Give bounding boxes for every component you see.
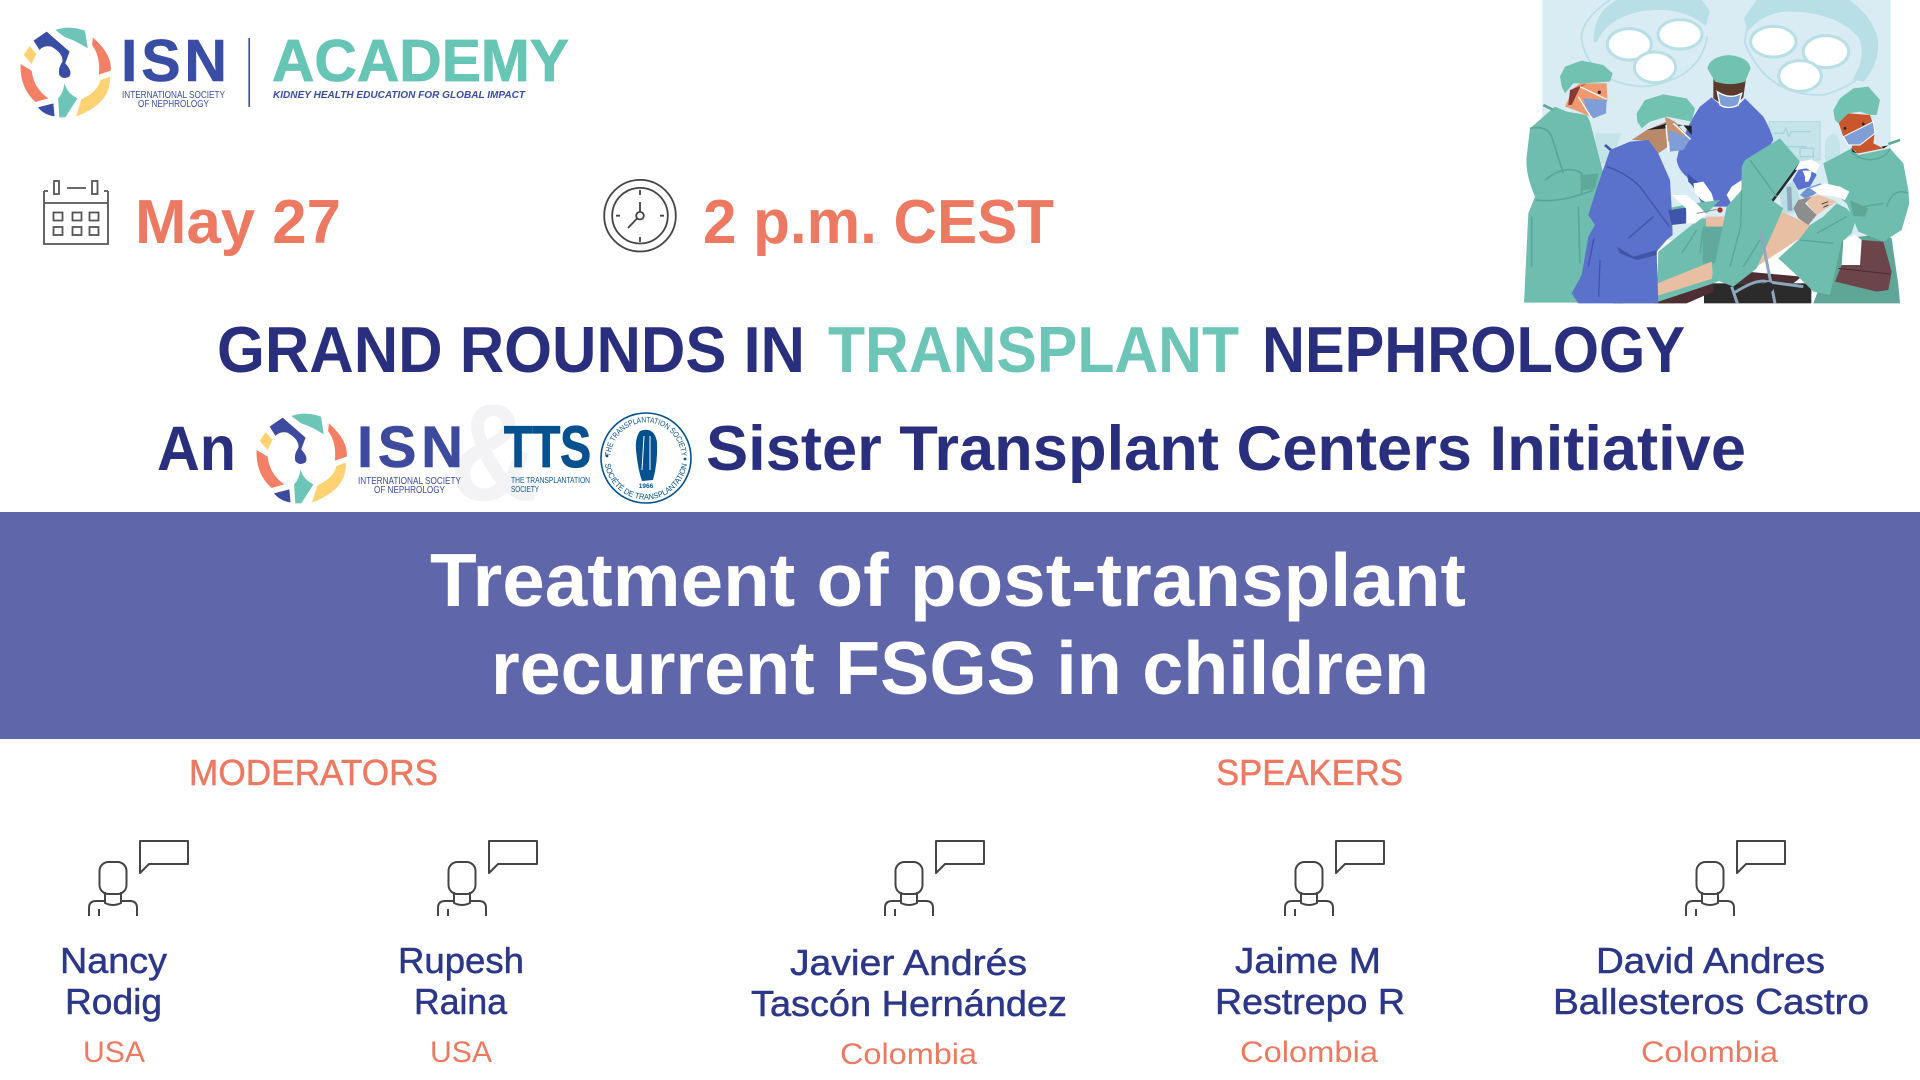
room background: [1542, 0, 1891, 240]
icon: ISN ring emblem small: [257, 414, 347, 503]
ISN subtitle: INTERNATIONAL SOCIETY: [122, 90, 225, 101]
TTS subtitle: SOCIETY: [511, 484, 539, 494]
Academy wordmark: ACADEMY: [272, 28, 569, 94]
ISN wordmark: ISN: [121, 28, 227, 94]
heading: Grand Rounds: TRANSPLANT: [828, 313, 1239, 386]
illustration: surgical team in operating room: [1500, 0, 1909, 303]
moderator: Nancy Rodig: Rodig: [65, 981, 162, 1022]
moderator: Rupesh Raina: Raina: [414, 981, 508, 1022]
heading: speakers: SPEAKERS: [1216, 752, 1403, 793]
TTS subtitle: [511, 475, 590, 494]
icon: person with speech bubble 1: [89, 841, 188, 916]
heading: initiative line with partner logos: [157, 376, 1746, 530]
moderator: Rupesh Raina: USA: [430, 1036, 492, 1069]
icon: person with speech bubble 4: [1285, 841, 1384, 916]
speaker: David Andres Ballesteros Castro: Ballesteros Castro: [1553, 981, 1869, 1022]
heading: Grand Rounds: GRAND ROUNDS IN: [217, 313, 805, 386]
moderator: Rupesh Raina: [398, 940, 524, 1069]
Academy tagline: KIDNEY HEALTH EDUCATION FOR GLOBAL IMPACT: [273, 89, 527, 101]
date: May 27: [135, 188, 341, 257]
moderator: Nancy Rodig: Nancy: [60, 940, 167, 981]
speaker: Javier Andrés Tascón Hernández: [751, 942, 1067, 1071]
speaker: Jaime M Restrepo R: [1215, 940, 1405, 1069]
TTS wordmark: TTS: [504, 415, 591, 480]
seal: The Transplantation Society: 1966: [639, 483, 654, 490]
icon: person with speech bubble 3: [885, 841, 984, 916]
speaker: Jaime M Restrepo R: Jaime M: [1235, 940, 1381, 981]
surgeon: front in blue: [1572, 94, 1717, 303]
anaesthesia mask and hands: [1789, 159, 1849, 211]
TTS subtitle: THE TRANSPLANTATION: [511, 475, 590, 485]
moderator: Rupesh Raina: Rupesh: [398, 940, 524, 981]
banner: session topic: [0, 512, 1920, 739]
table stand: [1732, 232, 1803, 303]
ISN subtitle: OF NEPHROLOGY: [138, 99, 209, 110]
icon: clock: [604, 180, 676, 252]
speaker: David Andres Ballesteros Castro: Colombia: [1641, 1036, 1778, 1069]
ISN subtitle small: INTERNATIONAL SOCIETY: [358, 476, 461, 487]
icon: person with speech bubble 5: [1686, 841, 1785, 916]
heading: Grand Rounds: [217, 313, 1685, 386]
banner: session topic: recurrent FSGS in children: [491, 626, 1429, 710]
speaker: Jaime M Restrepo R: Restrepo R: [1215, 981, 1405, 1022]
surgeon: rear in blue: [1500, 0, 1773, 207]
initiative title: Sister Transplant Centers Initiative: [706, 414, 1746, 484]
ISN wordmark small: ISN: [357, 415, 463, 480]
speaker: Jaime M Restrepo R: Colombia: [1240, 1036, 1378, 1069]
speaker: Javier Andrés Tascón Hernández: Javier Andrés: [790, 942, 1027, 983]
banner: session topic: Treatment of post-transplant: [430, 538, 1466, 622]
ISN subtitle small: [358, 476, 461, 496]
ISN subtitle: [122, 90, 225, 110]
icon: calendar: [44, 181, 108, 244]
ISN subtitle small: OF NEPHROLOGY: [374, 485, 445, 496]
speaker: David Andres Ballesteros Castro: David Andres: [1596, 940, 1825, 981]
operating lamps: [1582, 0, 1877, 95]
moderator: Nancy Rodig: USA: [83, 1036, 145, 1069]
icon: ISN ring emblem: [21, 28, 111, 117]
heading: Grand Rounds: NEPHROLOGY: [1262, 313, 1685, 386]
logo: ISN Academy: [21, 28, 569, 117]
speaker: Javier Andrés Tascón Hernández: Colombia: [840, 1038, 977, 1071]
monitor and equipment: [1595, 122, 1840, 163]
seal: The Transplantation Society: SOCIÉTÉ DE TRANSPLANTATION: [605, 464, 687, 500]
moderator: Nancy Rodig: [60, 940, 167, 1069]
surgeon: left in green: [1524, 61, 1613, 303]
anaesthetist: right in green: [1813, 87, 1909, 303]
operating table: [1704, 235, 1892, 303]
seal: The Transplantation Society: THE TRANSPLANTATION SOCIETY: [605, 416, 687, 456]
seal: The Transplantation Society: [600, 412, 692, 504]
ampersand watermark: &: [450, 376, 538, 530]
speaker: Javier Andrés Tascón Hernández: Tascón Hernández: [751, 983, 1067, 1024]
icon: person with speech bubble 2: [438, 841, 537, 916]
speaker: David Andres Ballesteros Castro: [1553, 940, 1869, 1069]
green sheet over patient: [1712, 138, 1856, 295]
heading: moderators: MODERATORS: [189, 752, 438, 793]
time: 2 p.m. CEST: [703, 188, 1054, 257]
patient: [1613, 163, 1837, 303]
surgical drape: [1657, 200, 1753, 303]
heading: initiative line with partner logos: An: [157, 414, 236, 484]
